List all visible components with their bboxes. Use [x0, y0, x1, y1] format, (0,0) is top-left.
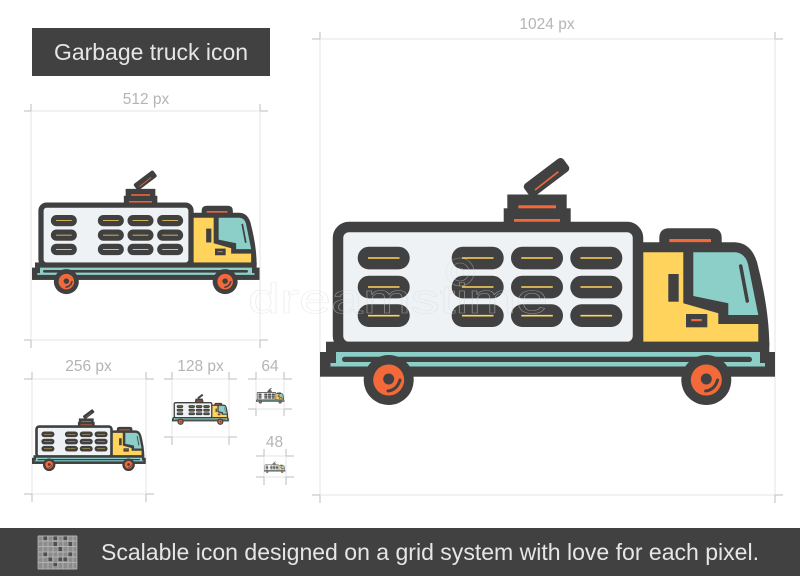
size guide: 64 px [248, 358, 292, 416]
size guide: 128 px [164, 358, 237, 445]
size guide: 256 px: 256 px [65, 358, 112, 375]
watermark [248, 258, 548, 322]
icon: garbage truck 64 px [256, 388, 284, 404]
size guide: 512 px [24, 91, 268, 348]
cabin [640, 242, 769, 346]
size guide: 64 px: 64 [261, 358, 279, 375]
icon: garbage truck 256 px [32, 409, 146, 471]
icon: garbage truck 512 px [32, 170, 260, 294]
watermark: dreamstime [248, 275, 548, 322]
icon: pixel grid [38, 536, 77, 570]
hopper tower [504, 194, 571, 223]
icon: garbage truck 1024 px [320, 156, 775, 405]
cargo container [338, 227, 638, 347]
size guide: 48 px: 48 [266, 434, 283, 451]
chassis [320, 342, 775, 377]
footer bar [0, 528, 800, 576]
left wheel [364, 355, 414, 405]
size guide: 256 px [24, 358, 154, 502]
container vent slots [358, 247, 622, 327]
size guide: 48 px [256, 434, 294, 485]
icon: garbage truck 128 px [172, 394, 229, 425]
tagline: Scalable icon designed on a grid system with love for each pixel. [101, 539, 759, 565]
title: Garbage truck icon [54, 39, 248, 65]
size guide: 128 px: 128 px [177, 358, 224, 375]
size guide: 1024 px: 1024 px [519, 16, 575, 33]
compactor arm [522, 156, 571, 199]
size guide: 512 px: 512 px [123, 91, 170, 108]
title [32, 28, 270, 76]
roof light [659, 228, 722, 246]
right wheel [681, 355, 731, 405]
icon: garbage truck 48 px [264, 461, 285, 473]
